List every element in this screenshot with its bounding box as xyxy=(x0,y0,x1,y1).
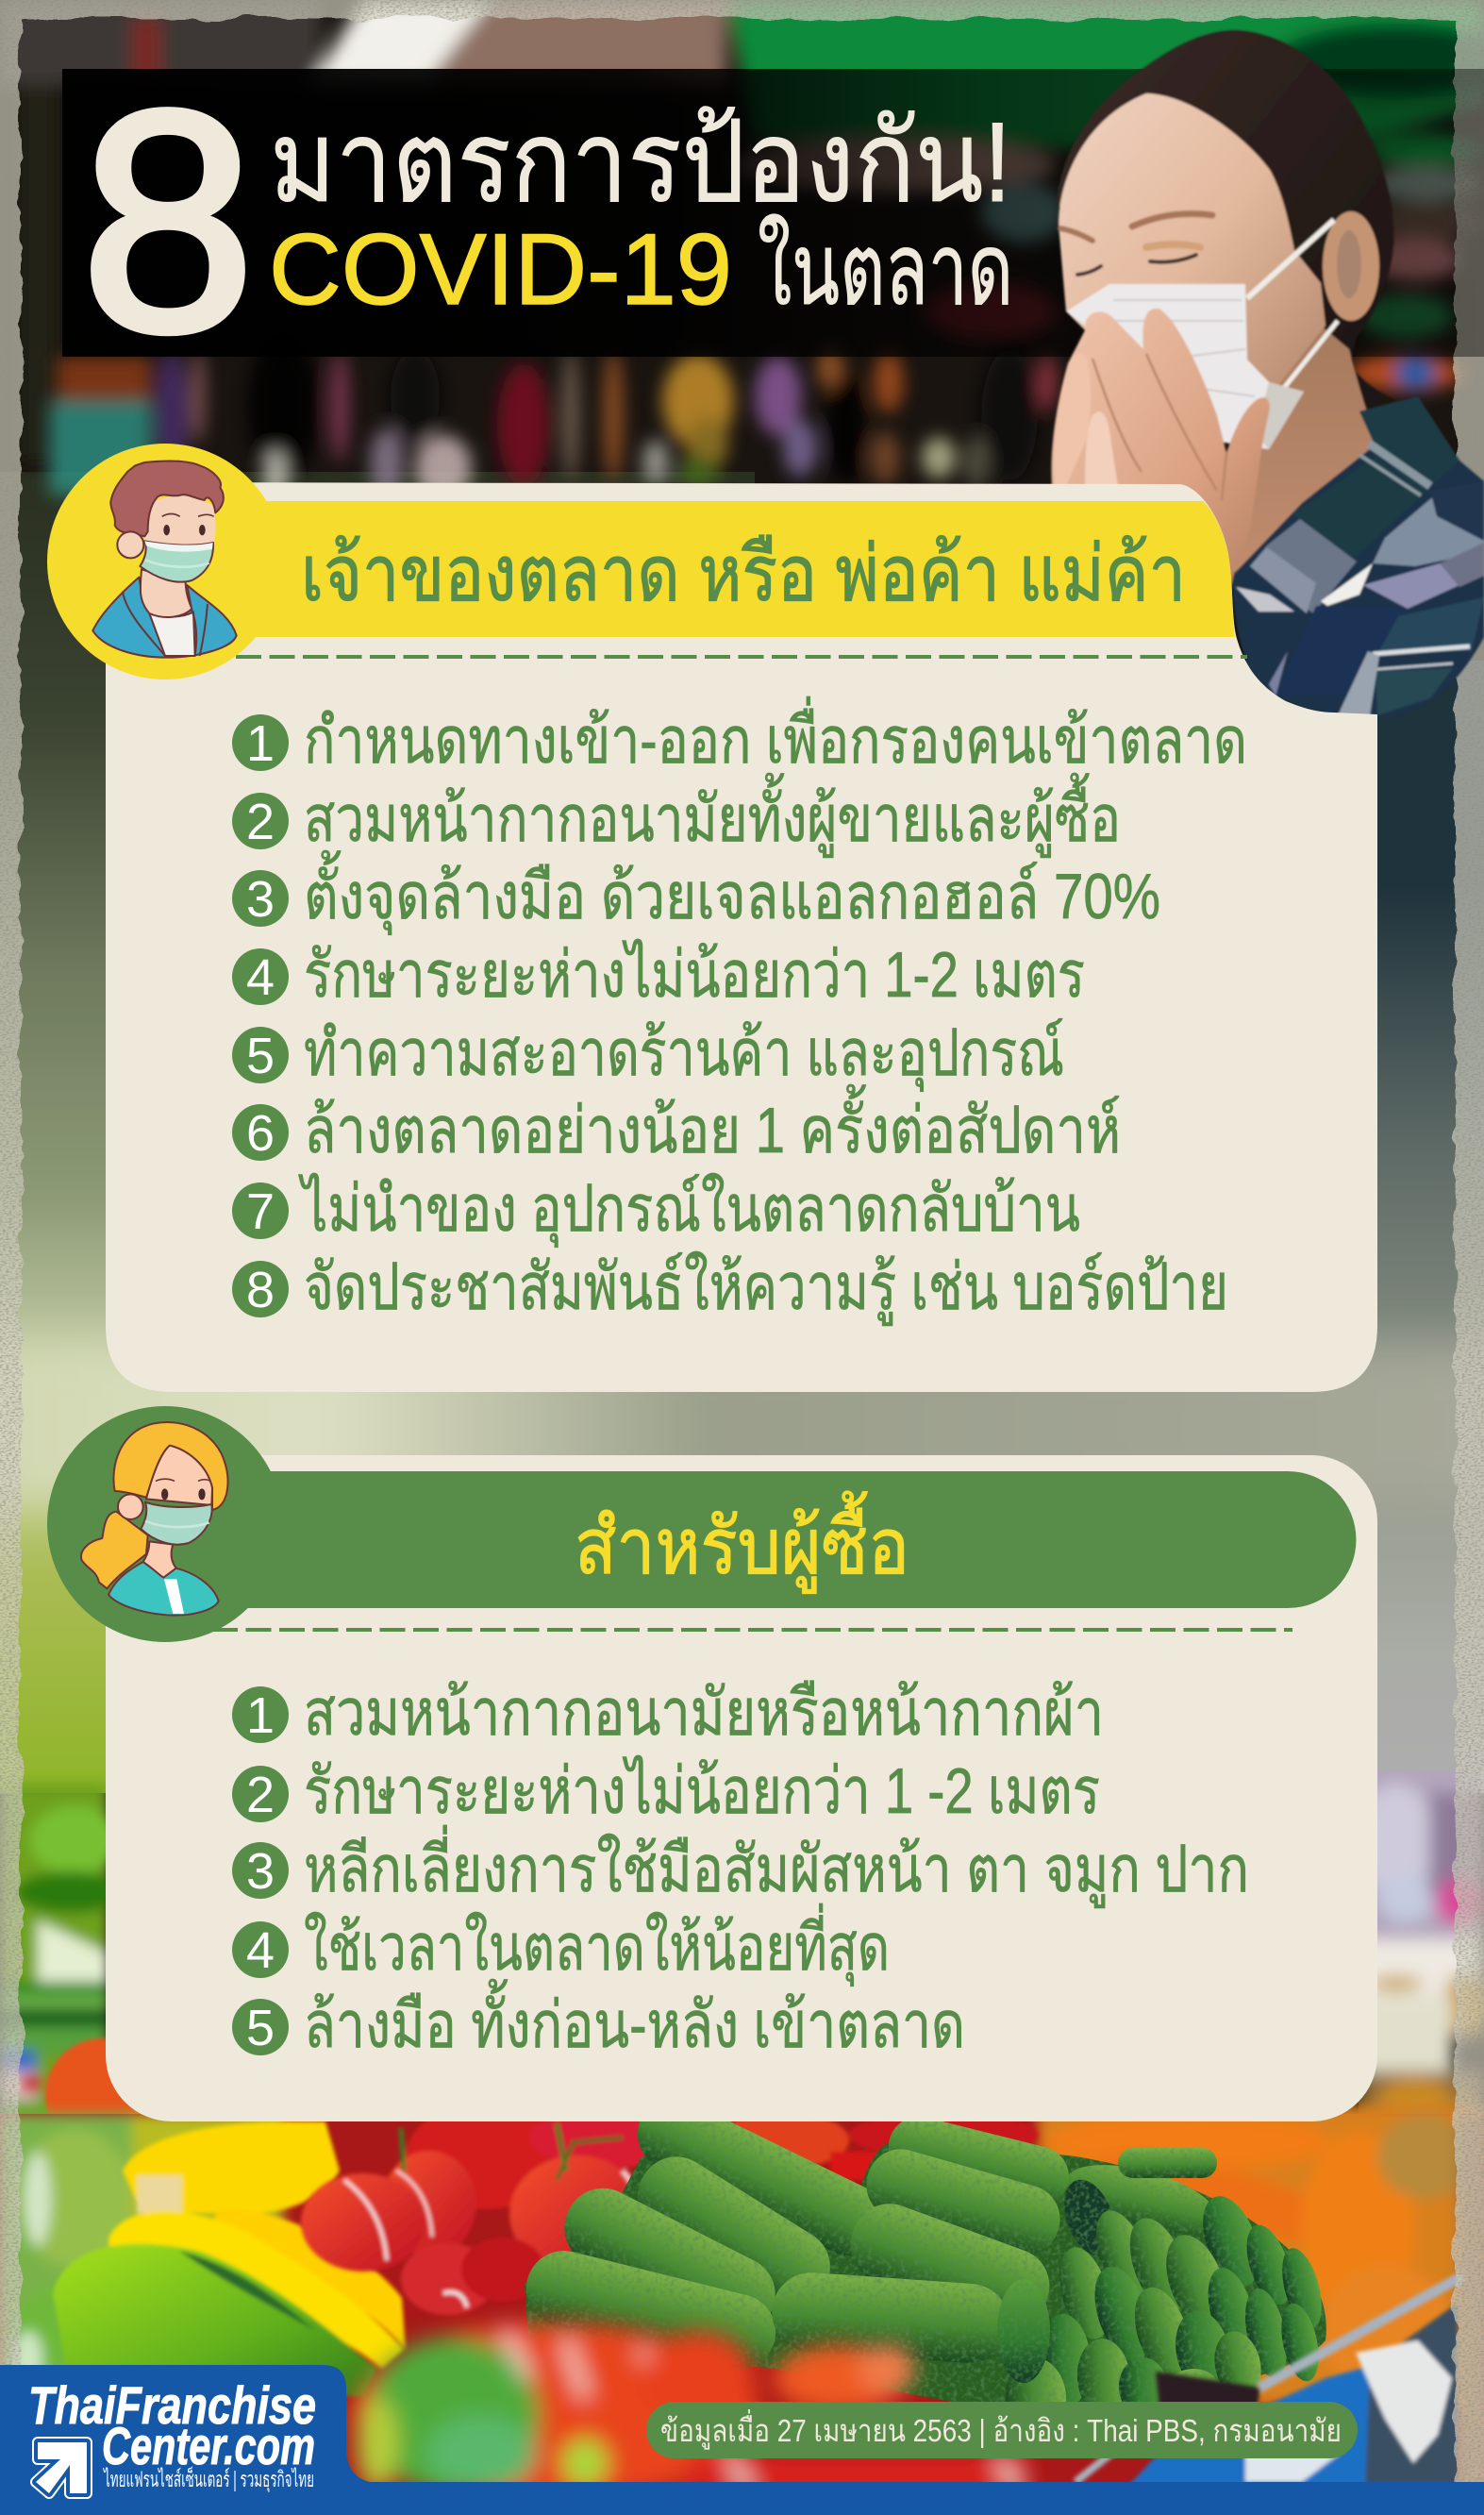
list: vendor measures xyxy=(232,696,1247,1326)
shirt xyxy=(1231,396,1484,717)
item 6: 6 xyxy=(246,1105,275,1162)
item 5 xyxy=(232,1979,965,2061)
item 3 xyxy=(232,850,1160,935)
item 1: 1 xyxy=(246,715,275,772)
title band xyxy=(62,69,1484,357)
logo wordmark: ThaiFranchise xyxy=(28,2375,316,2435)
title: COVID-19: COVID-19 xyxy=(269,212,732,326)
neck xyxy=(1217,326,1377,576)
item 2: 2 xyxy=(246,794,275,850)
cucumbers xyxy=(518,2086,1329,2440)
hands xyxy=(1051,309,1270,604)
item 3: หลีกเลี่ยงการใช้มือสัมผัสหน้า ตา จมูก ปาก xyxy=(304,1825,1249,1908)
ear xyxy=(1323,211,1379,321)
peppers xyxy=(0,2114,283,2397)
item 2: สวมหน้ากากอนามัยทั้งผู้ขายและผู้ซื้อ xyxy=(304,773,1121,858)
carrots and produce at right xyxy=(1038,2104,1484,2491)
header bar: yellow xyxy=(142,501,1235,637)
item 3: 3 xyxy=(246,1843,275,1900)
item 4: 4 xyxy=(246,949,275,1006)
item 3: 3 xyxy=(246,871,275,928)
logo tagline: ไทยแฟรนไชส์เซ็นเตอร์ | รวมธุรกิจไทย xyxy=(103,2465,314,2492)
item 8: จัดประชาสัมพันธ์ให้ความรู้ เช่น บอร์ดป้าย xyxy=(304,1250,1228,1326)
title: big number 8: 8 xyxy=(81,46,255,396)
mask and straps xyxy=(1066,220,1338,449)
hair xyxy=(1057,30,1406,472)
logo wordmark line 2: Center.com xyxy=(102,2416,315,2475)
avatar: male vendor in mask xyxy=(47,444,283,679)
item 4 xyxy=(232,1903,890,1987)
heading: buyers: สำหรับผู้ซื้อ xyxy=(575,1491,909,1593)
item 5: ล้างมือ ทั้งก่อน-หลัง เข้าตลาด xyxy=(304,1979,965,2061)
item 1: สวมหน้ากากอนามัยหรือหน้ากากผ้า xyxy=(304,1677,1104,1749)
small cucumbers at right xyxy=(1002,2148,1329,2440)
panel: market owners and vendors xyxy=(106,482,1377,1392)
item 1: กำหนดทางเข้า-ออก เพื่อกรองคนเข้าตลาด xyxy=(304,696,1247,777)
tomatoes xyxy=(301,2104,1038,2315)
item 3: ตั้งจุดล้างมือ ด้วยเจลแอลกอฮอล์ 70% xyxy=(304,850,1160,935)
source pill: ข้อมูลเมื่อ 27 เมษายน 2563 | อ้างอิง : Thai PBS, กรมอนามัย xyxy=(660,2409,1342,2450)
item 4: ใช้เวลาในตลาดให้น้อยที่สุด xyxy=(304,1903,890,1987)
list: buyer measures xyxy=(232,1677,1249,2061)
item 6 xyxy=(232,1084,1121,1166)
item 7: 7 xyxy=(246,1183,275,1240)
item 4: 4 xyxy=(246,1922,275,1979)
item 7: ไม่นำของ อุปกรณ์ในตลาดกลับบ้าน xyxy=(298,1172,1080,1248)
right side scene beside panel 2 xyxy=(1359,1771,1484,2114)
item 4: รักษาระยะห่างไม่น้อยกว่า 1-2 เมตร xyxy=(304,938,1085,1011)
item 1 xyxy=(232,696,1247,777)
source pill xyxy=(646,2402,1358,2458)
woman in surgical mask xyxy=(1051,30,1484,717)
logo block and footer bar xyxy=(0,2365,1484,2515)
header bar: green xyxy=(142,1471,1356,1608)
face xyxy=(1059,93,1326,415)
item 5: 5 xyxy=(246,2000,275,2056)
avatar: female buyer in mask xyxy=(47,1406,283,1642)
item 3 xyxy=(232,1825,1249,1908)
blurred foreground tomatoes xyxy=(354,2322,1028,2501)
background: vegetable photo xyxy=(0,2086,1484,2501)
item 2: รักษาระยะห่างไม่น้อยกว่า 1 -2 เมตร xyxy=(304,1754,1100,1827)
big cucumbers xyxy=(518,2086,1075,2383)
heading: vendors: เจ้าของตลาด หรือ พ่อค้า แม่ค้า xyxy=(301,531,1186,617)
eyes and brows xyxy=(1060,213,1212,275)
item 2 xyxy=(232,773,1121,858)
icon: logo arrow xyxy=(36,2442,87,2493)
item 8: 8 xyxy=(246,1262,275,1318)
title: in market: ในตลาด xyxy=(758,214,1013,326)
crate and cloth xyxy=(1075,2276,1462,2491)
item 1: 1 xyxy=(246,1687,275,1744)
panel: for buyers xyxy=(106,1455,1377,2121)
title: line 1: มาตรการป้องกัน! xyxy=(270,99,1011,226)
item 6: ล้างตลาดอย่างน้อย 1 ครั้งต่อสัปดาห์ xyxy=(304,1084,1121,1166)
item 5: ทำความสะอาดร้านค้า และอุปกรณ์ xyxy=(304,1017,1064,1092)
item 5: 5 xyxy=(246,1028,275,1084)
item 2: 2 xyxy=(246,1767,275,1823)
left side scene beside panel 2 xyxy=(0,1784,127,2123)
